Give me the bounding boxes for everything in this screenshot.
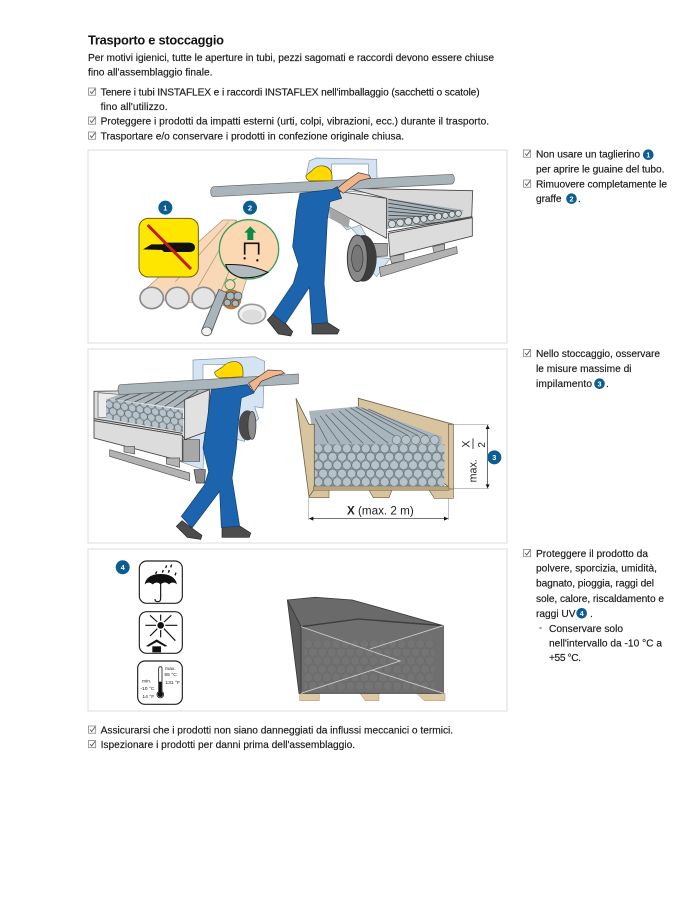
badge 1: 1 xyxy=(163,203,167,212)
icon: temperature range: 131 °F xyxy=(165,680,180,686)
worker xyxy=(267,166,371,336)
cover side xyxy=(287,600,301,693)
icon: temperature range: min. xyxy=(142,679,151,685)
title: Trasporto e stoccaggio xyxy=(88,32,224,48)
cover front xyxy=(301,619,443,693)
panel: storage protection xyxy=(88,549,507,711)
pallet feet xyxy=(300,693,445,701)
icon: no cutter sign xyxy=(139,218,198,277)
icon: keep dry xyxy=(139,561,182,603)
dimension: height: max. xyxy=(468,459,480,482)
side note: panel 2: impilamento xyxy=(536,379,592,390)
icon: temperature range: 55 °C xyxy=(164,672,177,678)
tube end ring xyxy=(238,304,266,324)
side note: panel 1: per aprire le guaine del tubo. xyxy=(536,164,664,176)
truck xyxy=(307,158,473,282)
intro text: Per motivi igienici, tutte le aperture in tubi, pezzi sagomati e raccordi devono essere chiuse xyxy=(88,53,494,64)
side note: panel 1: 2 xyxy=(570,194,574,203)
icon: temperature range: -10 °C xyxy=(140,686,155,692)
side note: panel 3: Proteggere il prodotto da xyxy=(536,549,648,560)
panel: unpacking tubes xyxy=(88,150,507,343)
tube ends under cover xyxy=(304,640,434,690)
side note: panel 3: Conservare solo xyxy=(549,624,623,635)
side note: panel 1: . xyxy=(578,194,581,205)
icon: temperature range: 14 °F xyxy=(142,694,154,700)
carried pipe xyxy=(211,174,454,197)
intro text xyxy=(88,53,494,78)
icon: temperature range: max. xyxy=(165,666,176,672)
top checklist: Tenere i tubi INSTAFLEX e i raccordi INSTAFLEX nell'imballaggio (sacchetti o scatole) xyxy=(101,88,480,98)
top checklist: fino all'utilizzo. xyxy=(101,102,168,113)
side note: panel 3: polvere, sporcizia, umidità, xyxy=(536,564,657,575)
side note: panel 3: raggi UV xyxy=(536,609,576,620)
side note: panel 3: 4 xyxy=(580,609,584,618)
illustration: tube bundle and icons xyxy=(139,201,279,336)
cover ridge xyxy=(301,619,443,627)
badge 3 xyxy=(487,450,501,464)
icon: staple detail xyxy=(219,220,279,290)
side note: panel 1: Non usare un taglierino xyxy=(536,150,640,160)
side note: panel 2 xyxy=(524,349,660,390)
side note: panel 2: 3 xyxy=(598,379,602,388)
dimension: height: 2 xyxy=(477,442,488,448)
side note: panel 1 xyxy=(524,149,667,205)
loose tube xyxy=(202,289,227,336)
side note: panel 3: . xyxy=(590,609,593,620)
bottom checklist xyxy=(88,726,453,751)
illustration: covered pallet xyxy=(287,597,445,701)
top checklist xyxy=(88,88,489,142)
icon: keep out of sun xyxy=(139,612,182,653)
panel: stacking xyxy=(88,349,507,543)
carried pipe xyxy=(118,374,298,395)
badge 4: 4 xyxy=(121,563,125,572)
dimension: width: X (max. 2 m) xyxy=(347,505,414,518)
side note: panel 3: +55 °C. xyxy=(549,653,581,664)
worker xyxy=(176,362,285,539)
badge 3: 3 xyxy=(492,453,496,462)
bottom checklist: Ispezionare i prodotti per danni prima dell'assemblaggio. xyxy=(101,740,355,751)
badge 2: 2 xyxy=(248,203,252,212)
illustration: truck and worker xyxy=(211,158,473,336)
illustration: pallet stack with dimensions xyxy=(296,398,501,521)
icon: temperature range xyxy=(138,661,182,704)
top checklist: Trasportare e/o conservare i prodotti in confezione originale chiusa. xyxy=(101,132,404,142)
side note: panel 3 xyxy=(524,549,664,664)
bottom checklist: Assicurarsi che i prodotti non siano danneggiati da influssi meccanici o termici. xyxy=(101,726,453,736)
side note: panel 3: nell'intervallo da -10 °C a xyxy=(549,639,662,650)
pallet stack xyxy=(296,398,453,498)
side note: panel 2: . xyxy=(606,379,609,390)
cover seams xyxy=(301,626,443,693)
dimension: height: X xyxy=(460,441,472,448)
side note: panel 1: Rimuovere completamente le xyxy=(536,180,667,190)
intro text: fino all'assemblaggio finale. xyxy=(88,68,212,78)
side note: panel 1: graffe xyxy=(536,194,562,205)
dimension: height xyxy=(453,425,490,488)
side note: panel 3: sole, calore, riscaldamento e xyxy=(536,594,664,605)
dimension: width xyxy=(308,498,448,521)
truck xyxy=(94,357,265,483)
side note: panel 2: le misure massime di xyxy=(536,364,632,375)
tubes in sleeve xyxy=(140,220,246,309)
top checklist: Proteggere i prodotti da impatti esterni (urti, colpi, vibrazioni, ecc.) durante il trasporto. xyxy=(101,116,489,128)
illustration: truck and worker xyxy=(94,357,298,539)
side note: panel 2: Nello stoccaggio, osservare xyxy=(536,349,660,360)
cover top xyxy=(287,597,443,627)
side note: panel 1: 1 xyxy=(646,150,650,159)
badge 4 xyxy=(116,560,130,574)
side note: panel 3: bagnato, pioggia, raggi del xyxy=(536,579,654,590)
